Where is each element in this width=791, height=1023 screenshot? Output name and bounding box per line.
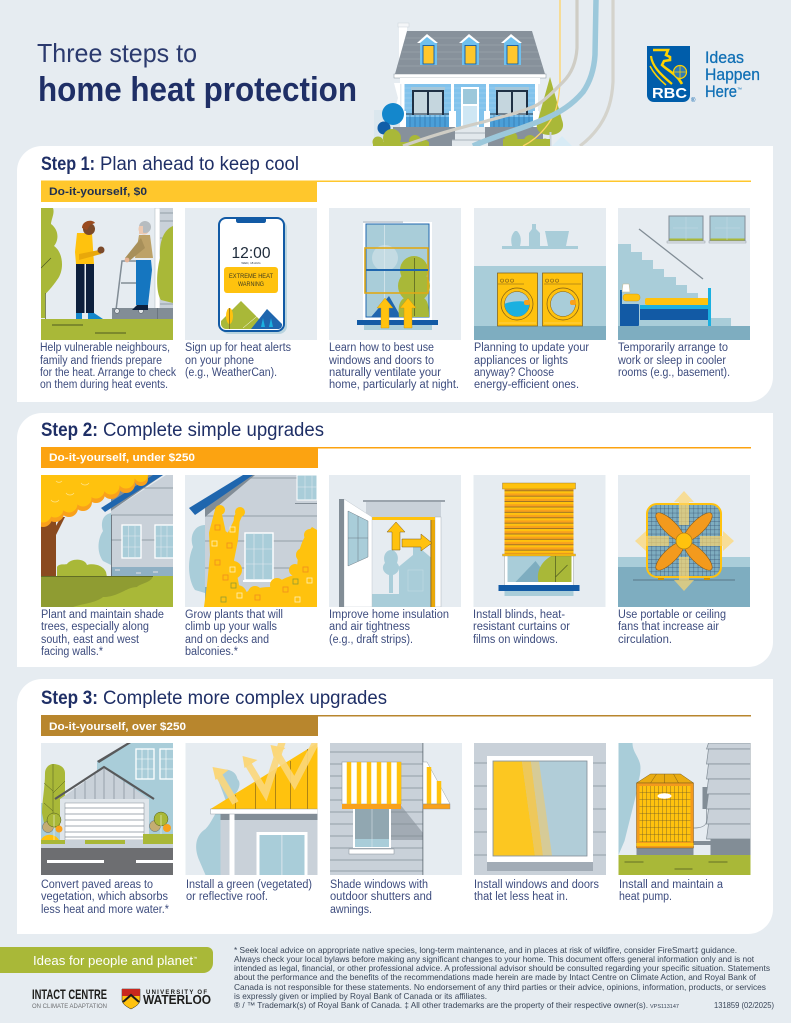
- footnotes and disclaimer: Canada is not responsible for these statements. No endorsement of any third parties or their advice, opinions, information, products, or services: [234, 983, 766, 992]
- tile: phone heat alerts: [185, 208, 317, 340]
- caption: fans: Use portable or ceiling: [618, 609, 726, 621]
- cost bar: do-it-yourself over $250: Do-it-yourself, over $250: [49, 721, 186, 733]
- tile: neighbours: [41, 208, 173, 340]
- caption: vegetation: [41, 879, 169, 916]
- caption: roof: or reflective roof.: [186, 891, 268, 903]
- tile: shade trees: [41, 475, 173, 607]
- caption: appliances: appliances or lights: [474, 355, 568, 367]
- tile: paved areas to vegetation: [41, 743, 178, 875]
- caption: climbing plants: and on decks and: [185, 634, 269, 646]
- heading: step 2: Step 2:: [41, 420, 98, 441]
- caption: roof: Install a green (vegetated): [186, 879, 312, 891]
- footer tag: ideas for people and planet: [0, 947, 213, 973]
- logo: RBC Ideas Happen Here: RBC: [652, 85, 687, 102]
- tile: phone heat alerts: WED, 18 AUG: [241, 261, 261, 265]
- caption: cooler rooms: rooms (e.g., basement).: [618, 367, 730, 379]
- caption: ventilation: windows and doors to: [328, 355, 434, 367]
- tile: phone heat alerts: WARNING: [238, 282, 264, 288]
- caption: neighbours: for the heat. Arrange to check: [40, 367, 176, 379]
- caption: blinds: Install blinds, heat-: [473, 609, 565, 621]
- tile: climbing plants: [185, 475, 317, 607]
- caption: insulation: and air tightness: [329, 621, 410, 633]
- tile: shutters and awnings: [330, 743, 462, 875]
- caption: climbing plants: balconies.*: [185, 646, 238, 658]
- caption: shade trees: [41, 609, 164, 658]
- logo: Intact Centre: INTACT CENTRE: [32, 986, 107, 1002]
- caption: shade trees: south, east and west: [41, 634, 140, 646]
- caption: insulation: (e.g., draft strips).: [329, 634, 413, 646]
- tile: low-heat windows and doors: [474, 743, 606, 875]
- caption: ventilation: naturally ventilate your: [329, 367, 441, 379]
- footer tag: ideas for people and planet: Ideas for people and planet: [33, 953, 193, 968]
- logo: RBC Ideas Happen Here: ™: [737, 87, 742, 93]
- tile: laundry appliances: [474, 208, 606, 340]
- caption: fans: [618, 609, 726, 646]
- caption: roof: [186, 879, 312, 903]
- tile: heat pump: [618, 743, 750, 875]
- caption: appliances: [474, 342, 589, 391]
- cost bar: do-it-yourself $0: Do-it-yourself, $0: [49, 186, 147, 198]
- tile: blinds: [474, 475, 606, 607]
- caption: shade trees: trees, especially along: [41, 621, 149, 633]
- caption: windows: [474, 879, 599, 903]
- captions: step 1: [40, 342, 730, 391]
- logo: RBC Ideas Happen Here: Ideas: [705, 49, 744, 67]
- caption: neighbours: [40, 342, 176, 391]
- tile: green or reflective roof: [186, 739, 318, 875]
- caption: shutters: awnings.: [330, 904, 372, 916]
- caption: climbing plants: [185, 609, 283, 658]
- tile: window ventilation: [329, 208, 461, 340]
- heading: step 3: Step 3:: [41, 688, 98, 709]
- logo: RBC Ideas Happen Here: Here: [705, 83, 737, 101]
- logo: University of Waterloo: WATERLOO: [143, 993, 211, 1007]
- caption: neighbours: Help vulnerable neighbours,: [40, 342, 170, 354]
- footnotes and disclaimer: is expressly given or implied by Royal Bank of Canada or its affiliates.: [234, 992, 487, 1001]
- caption: cooler rooms: work or sleep in cooler: [617, 355, 726, 367]
- caption: appliances: energy-efficient ones.: [474, 379, 579, 391]
- logo: University of Waterloo: [122, 989, 211, 1009]
- footnotes and disclaimer: VPS113147: [650, 1004, 679, 1010]
- footnotes and disclaimer: * Seek local advice on appropriate native species, long-term maintenance, and in places at risk of wildfire, consider FireSmart‡ guidance.: [234, 946, 737, 955]
- woman and walker: [115, 221, 153, 313]
- caption: windows: Install windows and doors: [474, 879, 599, 891]
- footnotes and disclaimer: [234, 946, 774, 1010]
- footnotes and disclaimer: intended as legal, financial, or other professional advice. A professional advisor should be consulted regarding your specific situation. Statements: [234, 964, 770, 973]
- caption: shutters: outdoor shutters and: [330, 891, 432, 903]
- heading: step 2: Complete simple upgrades: [103, 420, 324, 441]
- caption: shutters: Shade windows with: [330, 879, 428, 891]
- caption: blinds: [473, 609, 570, 646]
- caption: appliances: Planning to update your: [474, 342, 589, 354]
- heading: step 1: Step 1:: [41, 154, 95, 175]
- caption: vegetation: Convert paved areas to: [41, 879, 153, 891]
- caption: windows: that let less heat in.: [474, 891, 568, 903]
- logo: Intact Centre: [32, 986, 107, 1010]
- caption: cooler rooms: Temporarily arrange to: [618, 342, 728, 354]
- captions: step 3: [41, 879, 724, 916]
- caption: appliances: anyway? Choose: [474, 367, 554, 379]
- caption: neighbours: on them during heat events.: [40, 379, 168, 391]
- caption: blinds: films on windows.: [473, 634, 558, 646]
- logo: University of Waterloo: UNIVERSITY OF: [146, 990, 207, 996]
- tile: phone heat alerts: EXTREME HEAT: [229, 274, 273, 280]
- title: home heat protection: [38, 71, 357, 109]
- caption: phone alerts: on your phone: [185, 355, 254, 367]
- caption: climbing plants: climb up your walls: [185, 621, 277, 633]
- caption: fans: circulation.: [618, 634, 672, 646]
- title: [37, 38, 357, 109]
- caption: heat pump: [619, 879, 724, 903]
- heading: step 1: Plan ahead to keep cool: [100, 154, 299, 175]
- cost bar: do-it-yourself $0: [41, 180, 751, 202]
- man: [75, 221, 104, 319]
- footnotes and disclaimer: ® / ™ Trademark(s) of Royal Bank of Canada. ‡ All other trademarks are the property of their respective owner(s).: [234, 1001, 648, 1010]
- caption: climbing plants: Grow plants that will: [185, 609, 283, 621]
- logo: RBC Ideas Happen Here: ®: [691, 97, 696, 104]
- caption: heat pump: heat pump.: [619, 891, 672, 903]
- panel: step 3: [17, 679, 773, 934]
- cost bar: do-it-yourself under $250: [41, 447, 751, 468]
- tile: basement bedroom: [618, 208, 750, 340]
- caption: shutters: [330, 879, 432, 916]
- panel: step 2: [17, 413, 773, 667]
- caption: phone alerts: (e.g., WeatherCan).: [185, 367, 277, 379]
- footnotes and disclaimer: Always check your local bylaws before making any significant changes to your home. This document offers general information only and is not: [234, 955, 755, 964]
- illustration: house with flowing lines: [372, 0, 613, 148]
- logo: Intact Centre: ON CLIMATE ADAPTATION: [32, 1003, 107, 1010]
- caption: heat pump: Install and maintain a: [619, 879, 724, 891]
- footnotes and disclaimer: 131859 (02/2025): [714, 1001, 774, 1010]
- caption: blinds: resistant curtains or: [473, 621, 570, 633]
- cost bar: do-it-yourself under $250: Do-it-yourself, under $250: [49, 452, 195, 464]
- caption: vegetation: less heat and more water.*: [41, 904, 169, 916]
- caption: phone alerts: [185, 342, 291, 379]
- caption: ventilation: Learn how to best use: [329, 342, 434, 354]
- tile: insulation and draft strips: [329, 475, 461, 607]
- caption: insulation: Improve home insulation: [329, 609, 449, 621]
- caption: insulation: [329, 609, 449, 646]
- caption: shade trees: Plant and maintain shade: [41, 609, 164, 621]
- caption: vegetation: vegetation, which absorbs: [41, 891, 168, 903]
- panel: step 1: [17, 146, 773, 402]
- title: Three steps to: [37, 38, 197, 68]
- footer tag: ideas for people and planet: ™: [193, 956, 198, 961]
- heading: step 3: Complete more complex upgrades: [103, 688, 387, 709]
- caption: phone alerts: Sign up for heat alerts: [185, 342, 291, 354]
- tile: fan: [618, 475, 750, 607]
- footnotes and disclaimer: about the performance and the benefits of the recommendations made herein are made by Intact Centre on Climate Action, and Royal Bank of: [234, 973, 757, 982]
- caption: ventilation: [328, 342, 459, 391]
- caption: shade trees: facing walls.*: [41, 646, 103, 658]
- logo: RBC Ideas Happen Here: Happen: [705, 66, 760, 84]
- caption: cooler rooms: [617, 342, 730, 379]
- logo: RBC Ideas Happen Here: [647, 46, 760, 104]
- tile: phone heat alerts: 12:00: [232, 245, 271, 262]
- caption: neighbours: family and friends prepare: [40, 355, 162, 367]
- cost bar: do-it-yourself over $250: [41, 715, 751, 736]
- caption: fans: fans that increase air: [618, 621, 719, 633]
- caption: ventilation: home, particularly at night.: [329, 379, 459, 391]
- captions: step 2: [41, 609, 726, 658]
